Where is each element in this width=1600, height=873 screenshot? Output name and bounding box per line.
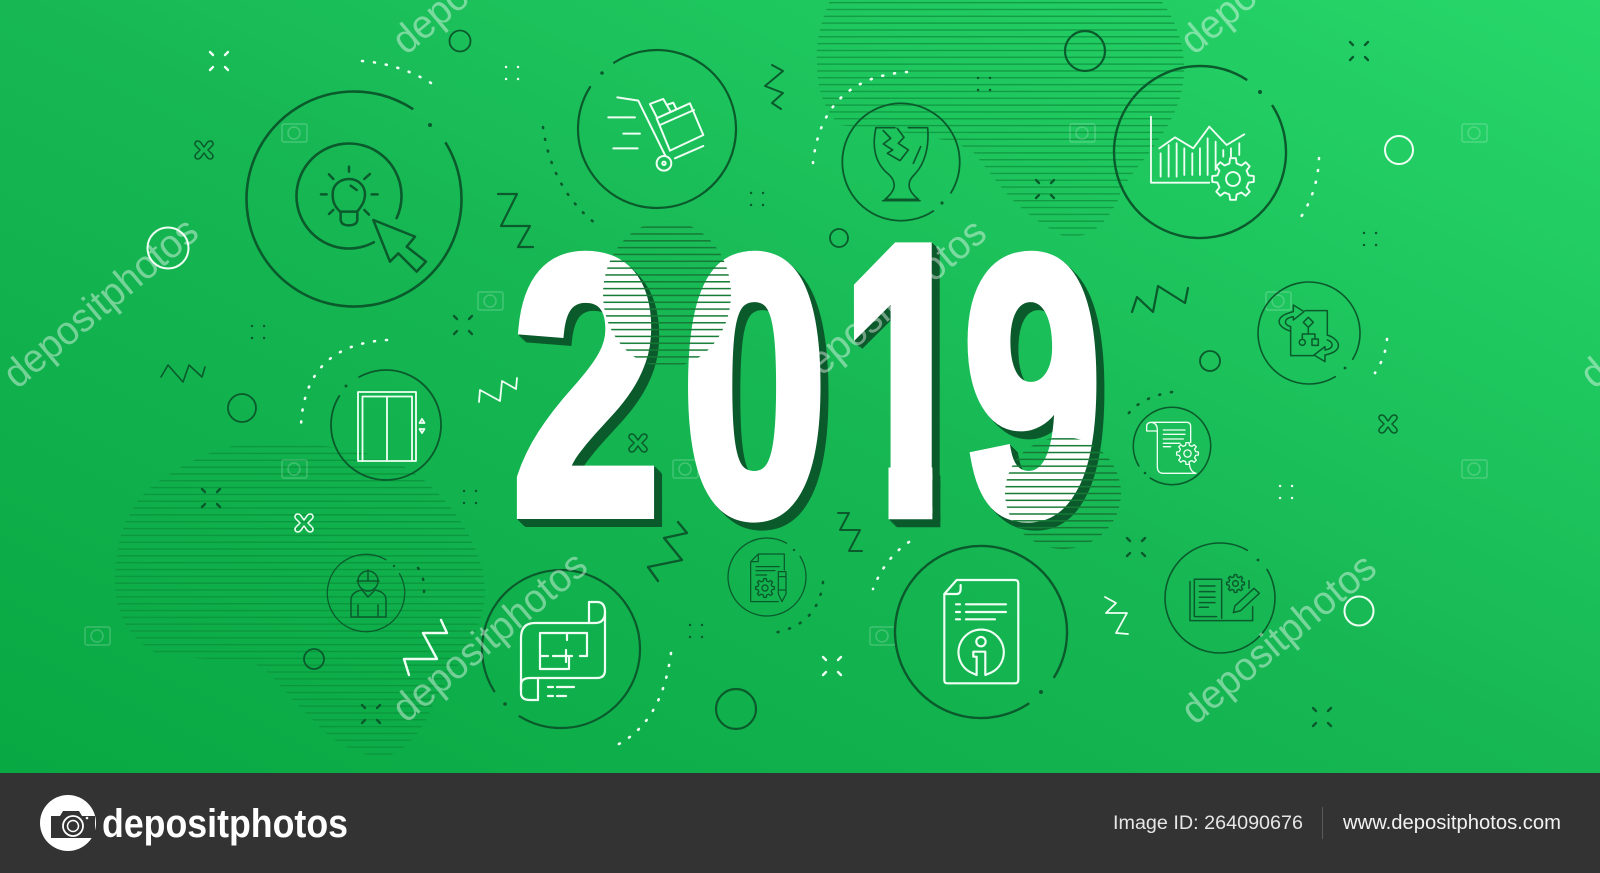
image id: Image ID: 264090676 <box>1113 813 1303 834</box>
zigzags <box>161 65 1188 675</box>
title: 2019 numerals: 9 <box>962 181 1101 591</box>
icon: broken glass <box>820 81 982 243</box>
title: 2019 numerals: 2 <box>512 181 660 591</box>
footer logo: depositphotos <box>102 802 348 846</box>
depositphotos watermarks: depositphotos <box>783 210 995 398</box>
dotted arcs <box>301 61 1387 745</box>
icon: algorithm flow document <box>1239 263 1379 403</box>
small ring outlines <box>228 30 1220 729</box>
hatched circle over 9 <box>1005 437 1121 549</box>
icon: house blueprint <box>452 540 670 758</box>
icon: information document <box>862 513 1100 751</box>
hatched blob: bottom left <box>115 442 485 756</box>
icon: technical scroll with gear <box>1119 393 1225 499</box>
four-dash marks <box>202 42 1368 726</box>
title: 2019 numerals: 0 <box>682 181 827 591</box>
hatched circle over 2 and 0 <box>603 221 731 367</box>
hatched blob: top right <box>817 0 1184 237</box>
icon: bar chart with gear <box>1081 33 1319 271</box>
website url: www.depositphotos.com <box>1342 812 1561 834</box>
icon: construction worker <box>313 540 419 646</box>
camera watermarks <box>85 124 1487 645</box>
depositphotos watermarks: depositphotos <box>0 209 207 397</box>
clover crosses <box>195 141 1397 532</box>
footer logo <box>40 795 348 851</box>
title: 2019 numerals: 1 <box>838 165 973 595</box>
depositphotos watermarks: depositphotos <box>384 543 596 731</box>
icon: elevator doors <box>311 350 461 500</box>
title: 2019 numerals <box>516 242 1104 531</box>
depositphotos watermarks: depositphotos <box>1173 545 1385 733</box>
icon: hand truck with boxes <box>548 20 766 238</box>
white ring outlines <box>148 136 1413 626</box>
icon: light bulb with cursor in double ring <box>206 51 502 347</box>
four-dot marks <box>252 67 1376 637</box>
icon: document with gear and pencil <box>713 523 821 631</box>
icon: open book with gear and pencil <box>1145 523 1295 673</box>
footer bar <box>0 773 1600 873</box>
